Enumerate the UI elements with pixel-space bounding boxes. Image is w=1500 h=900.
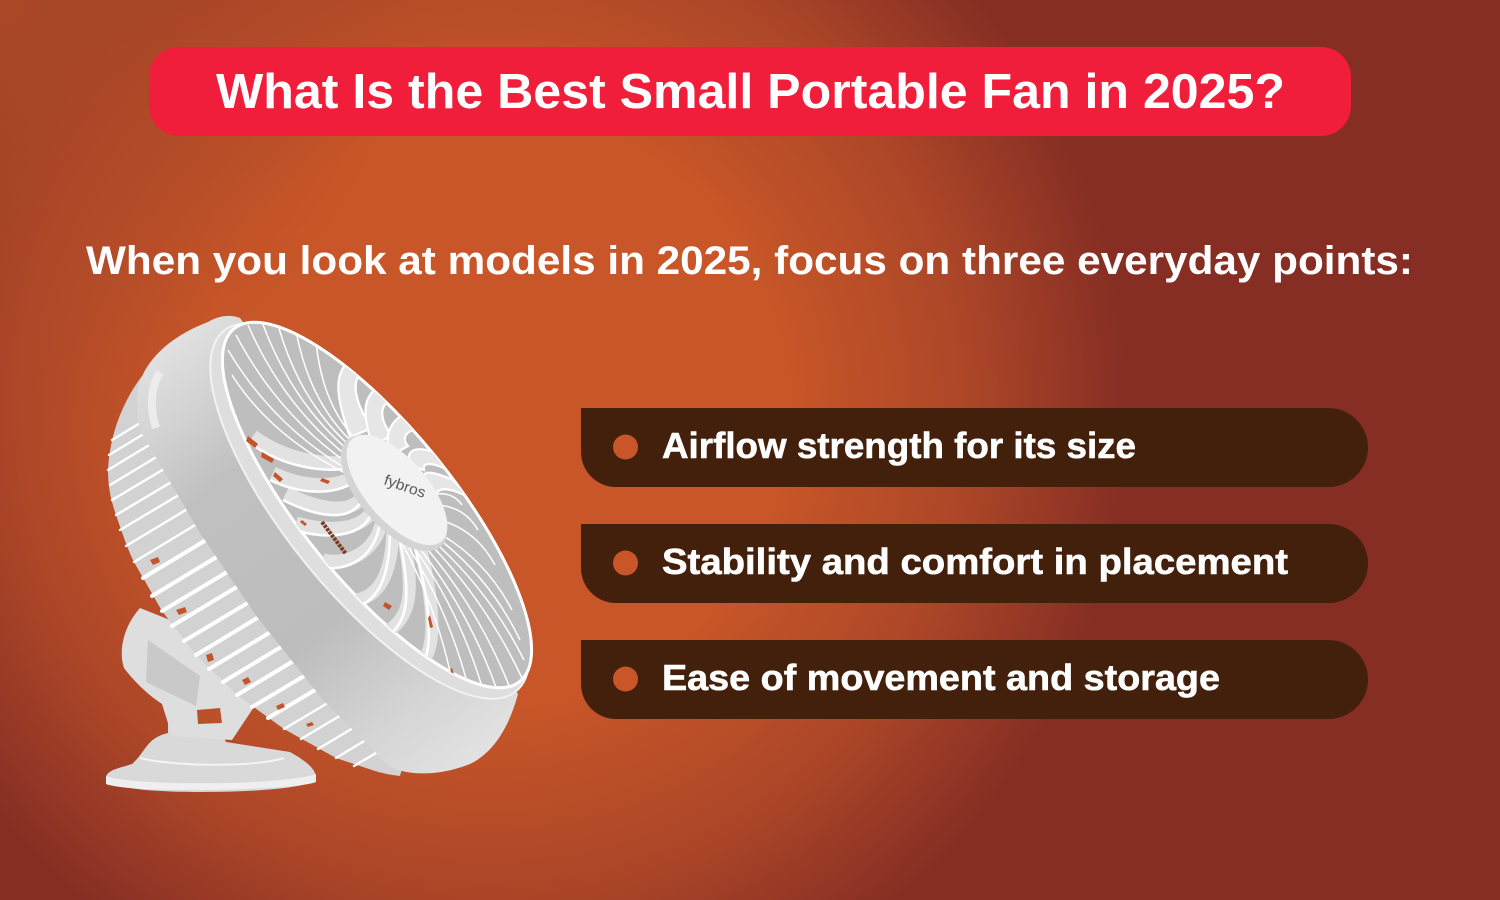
- subheading: When you look at models in 2025, focus on three everyday points:: [86, 239, 1413, 283]
- list item: airflow: [581, 408, 1368, 487]
- bullet: [613, 666, 638, 692]
- fan brand label: fybros: [382, 472, 428, 502]
- fan cage loops: [143, 522, 347, 718]
- title banner: What Is the Best Small Portable Fan in 2025?: [216, 65, 1285, 119]
- fan grille face: [221, 320, 534, 690]
- fan tilt mount: [122, 608, 256, 740]
- fan orange gaps: [246, 436, 456, 681]
- fan hub: [322, 417, 466, 569]
- fan upper-right blades: [338, 363, 470, 498]
- bullet: [613, 434, 638, 460]
- title banner: [149, 47, 1351, 136]
- list item: movement: [581, 640, 1368, 719]
- list item: movement: Ease of movement and storage: [662, 657, 1220, 698]
- fan lower-left blades: [250, 436, 432, 663]
- fan base: [106, 719, 316, 792]
- list item: stability: Stability and comfort in placement: [662, 541, 1288, 582]
- fan grille vanes: [228, 322, 524, 690]
- fan rear cage: [108, 376, 420, 776]
- fan front rim: [159, 278, 581, 744]
- fan illustration: [106, 316, 534, 792]
- bullet: [613, 550, 638, 576]
- fan outer band: [137, 316, 518, 773]
- list item: airflow: Airflow strength for its size: [662, 425, 1136, 466]
- list item: stability: [581, 524, 1368, 603]
